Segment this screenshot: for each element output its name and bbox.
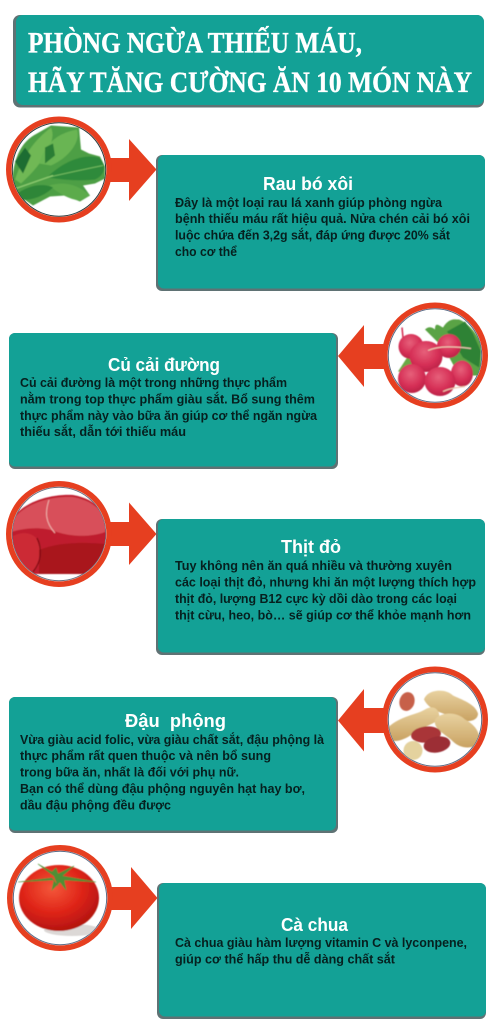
body text: cho cơ thể [175, 244, 237, 259]
body text: luộc chứa đến 3,2g sắt, đáp ứng được 20% sắt [175, 228, 451, 242]
heading: Cà chua [281, 915, 349, 935]
icon: beetroot in red ring [385, 305, 485, 406]
body text: các loại thịt đỏ, nhưng khi ăn một lượng thích hợp [175, 574, 476, 590]
icon: tomato in red ring [10, 848, 110, 948]
title line 1: PHÒNG NGỪA THIẾU MÁU, [28, 26, 362, 60]
body text: dầu đậu phộng đều được [20, 798, 171, 812]
icon: red meat in red ring [9, 484, 109, 584]
body text: trong bữa ăn, nhất là đối với phụ nữ. [20, 764, 239, 780]
body text: bệnh thiếu máu rất hiệu quả. Nửa chén cải bó xôi [175, 211, 470, 226]
body text [175, 558, 476, 622]
body text [20, 732, 325, 812]
panel: Đậu phộng [9, 697, 338, 833]
arrow: beet to card [338, 325, 390, 387]
heading: Thịt đỏ [281, 537, 341, 557]
arrow: meat to card [105, 502, 156, 565]
icon: spinach in red ring [9, 119, 109, 220]
panel: Rau bó xôi [156, 155, 485, 291]
body text: Cà chua giàu hàm lượng vitamin C và lyconpene, [175, 935, 467, 950]
body text [20, 375, 318, 439]
title banner [13, 15, 484, 108]
panel: Thịt đỏ [156, 519, 485, 655]
arrow: peanut to card [338, 689, 390, 752]
body text: giúp cơ thể hấp thu dễ dàng chất sắt [175, 952, 396, 966]
body text: nằm trong top thực phẩm giàu sắt. Bổ sung thêm [20, 392, 315, 406]
body text: thiếu sắt, dẫn tới thiếu máu [20, 424, 186, 439]
body text [175, 195, 470, 259]
panel: Cà chua [157, 883, 486, 1019]
body text: thịt cừu, heo, bò… sẽ giúp cơ thể khỏe mạnh hơn [175, 608, 471, 622]
arrow: tomato to card [106, 867, 158, 929]
body text: thực phẩm rất quen thuộc và nên bổ sung [20, 748, 271, 763]
body text: Đây là một loại rau lá xanh giúp phòng ngừa [175, 195, 443, 210]
heading: Củ cải đường [108, 355, 220, 375]
body text: Tuy không nên ăn quá nhiều và thường xuyên [175, 558, 452, 573]
body text: Củ cải đường là một trong những thực phẩm [20, 375, 287, 390]
body text: Bạn có thể dùng đậu phộng nguyên hạt hay bơ, [20, 781, 305, 796]
heading: Đậu phộng [125, 711, 226, 731]
body text: thịt đỏ, lượng B12 cực kỳ dồi dào trong các loại [175, 591, 457, 606]
panel: Củ cải đường [9, 333, 338, 469]
arrow: spinach to card [105, 139, 156, 201]
icon: peanuts in red ring [385, 669, 485, 770]
heading: Rau bó xôi [263, 174, 353, 194]
body text [175, 935, 467, 966]
body text: Vừa giàu acid folic, vừa giàu chất sắt, đậu phộng là [20, 732, 325, 747]
body text: thực phẩm này vào bữa ăn giúp cơ thể ngăn ngừa [20, 408, 318, 423]
